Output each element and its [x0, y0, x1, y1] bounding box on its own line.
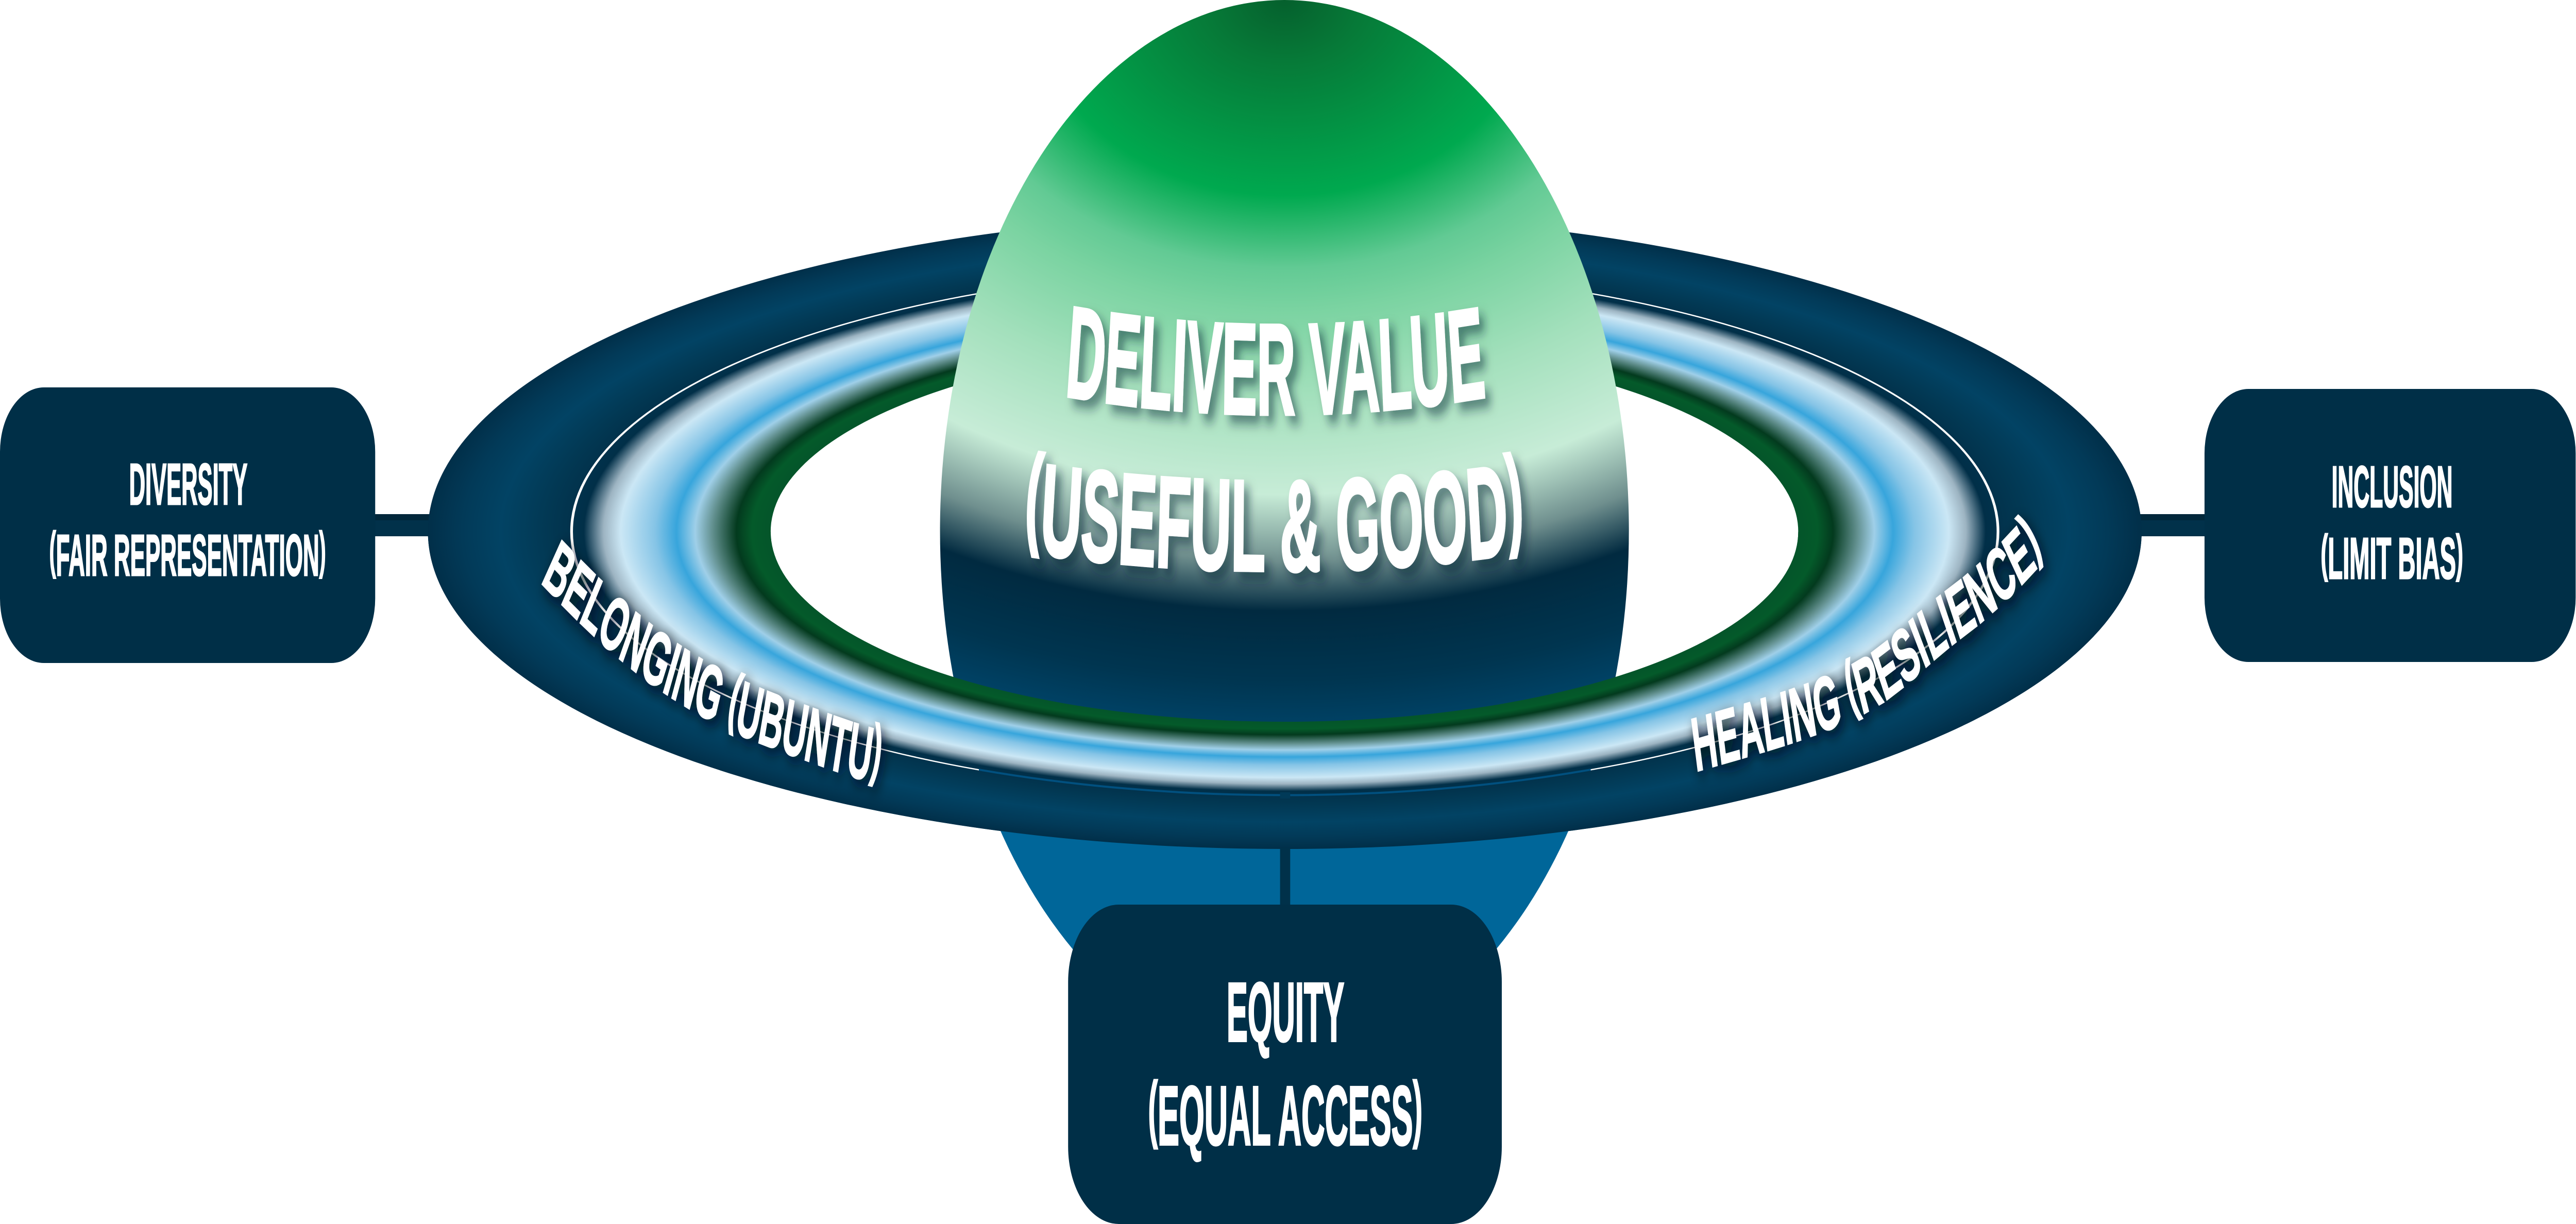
label: healing (resilience): ( — [1840, 654, 1870, 731]
text: fair representation: FAIR REPRESENTATION — [56, 523, 319, 588]
panel: equity — [1068, 905, 1502, 1224]
text: limit bias: LIMIT BIAS — [2328, 526, 2456, 591]
connector: equity to ring — [1280, 792, 1290, 907]
text: limit bias: ) — [2456, 524, 2463, 582]
subtitle: useful and good: ( — [1027, 450, 1055, 568]
panel: diversity — [0, 387, 375, 663]
ring: front half — [428, 532, 2142, 849]
ring: back half — [428, 214, 2142, 849]
text: diversity heading: DIVERSITY — [129, 452, 247, 517]
connector: diversity to ring — [374, 514, 431, 536]
planet — [940, 0, 1629, 1061]
text: inclusion heading: INCLUSION — [2332, 454, 2453, 520]
subtitle: useful and good: USEFUL & GOOD — [1043, 464, 1514, 586]
text: equal access: ( — [1148, 1067, 1158, 1149]
label: healing (resilience): ) — [2014, 514, 2050, 582]
label: healing (resilience): RESILIENCE — [1850, 525, 2043, 724]
title: deliver value: DELIVER VALUE — [1067, 306, 1495, 432]
connector: inclusion to ring — [2138, 514, 2207, 536]
panel: inclusion — [2205, 389, 2575, 662]
text: equity heading: EQUITY — [1227, 965, 1344, 1059]
text: fair representation: ( — [49, 521, 56, 579]
text: limit bias: ( — [2321, 524, 2328, 582]
label: belonging (ubuntu): BELONGING — [541, 538, 732, 733]
text: fair representation: ) — [319, 521, 326, 579]
label: belonging (ubuntu): UBUNTU — [736, 677, 883, 792]
label: belonging (ubuntu): ) — [860, 719, 892, 796]
label: belonging (ubuntu): ( — [725, 669, 753, 745]
text: equal access: EQUAL ACCESS — [1158, 1069, 1413, 1163]
label: healing (resilience): HEALING — [1687, 670, 1848, 781]
text: equal access: ) — [1413, 1067, 1422, 1149]
subtitle: useful and good: ) — [1502, 451, 1531, 570]
